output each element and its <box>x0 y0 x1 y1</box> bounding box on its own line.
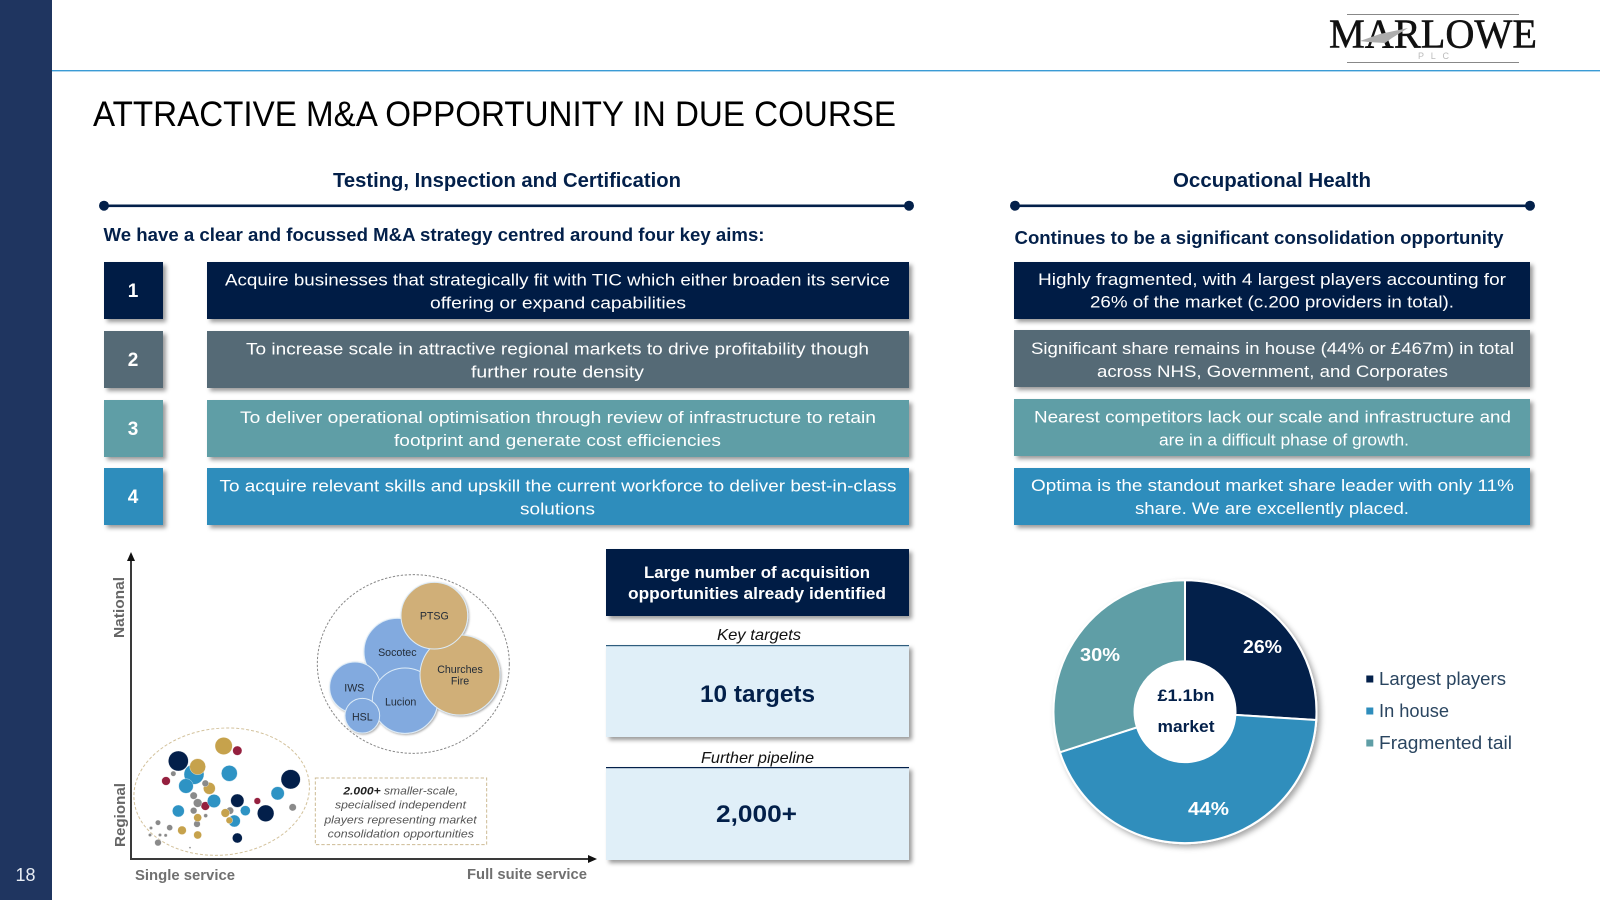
segment: in house 44% <box>1060 715 1316 843</box>
axis label: National: National <box>112 577 128 638</box>
aim 4 <box>104 468 909 525</box>
aim 1: Acquire businesses that strategically fit with TIC which either broaden its service <box>225 270 890 290</box>
aim 4: solutions <box>520 500 595 518</box>
aim 2: further route density <box>471 362 645 382</box>
callout: 2,000+ smaller-scale players: players representing market <box>323 814 478 826</box>
legend: Largest players <box>1379 669 1506 689</box>
aim 1 <box>104 262 909 319</box>
label: Further pipeline: Further pipeline <box>701 750 814 767</box>
logo: Marlowe PLC: MARLOWE <box>1329 10 1537 56</box>
header rule <box>52 70 1600 71</box>
value labels: 30% <box>1080 644 1120 665</box>
title: ATTRACTIVE M&A OPPORTUNITY IN DUE COURSE <box>93 95 896 134</box>
large players bubbles: Churches <box>437 664 483 676</box>
callout: 2,000+ smaller-scale players: 2.000+ smaller-scale, <box>342 785 458 797</box>
page number: 18 <box>16 865 36 885</box>
point 4: Optima is the standout market share leader with only 11% <box>1031 476 1514 495</box>
aim 4: 4 <box>128 487 139 508</box>
large players bubbles: Socotec <box>378 647 417 659</box>
legend: Fragmented tail <box>1379 733 1512 753</box>
donut chart: £1.1bn market <box>1052 579 1318 844</box>
heading: Occupational Health: Occupational Health <box>1173 170 1371 192</box>
point 4 <box>1014 468 1530 525</box>
legend <box>1366 669 1512 753</box>
large players bubbles: IWS <box>344 683 364 695</box>
centre label <box>1158 686 1215 736</box>
axis label: Single service: Single service <box>135 868 235 884</box>
large players bubbles: Fire <box>451 676 469 688</box>
banner: acquisition opportunities: opportunities already identified <box>628 585 886 603</box>
aim 3: 3 <box>128 419 138 440</box>
centre label: £1.1bn <box>1158 686 1214 705</box>
point 3: are in a difficult phase of growth. <box>1159 430 1409 450</box>
large players bubbles: PTSG <box>420 610 449 622</box>
aim 3: To deliver operational optimisation through review of infrastructure to retain <box>240 408 876 427</box>
large players bubbles: HSL <box>352 711 373 723</box>
point 3: Nearest competitors lack our scale and infrastructure and <box>1034 408 1511 426</box>
point 1: 26% of the market (c.200 providers in total). <box>1090 292 1454 312</box>
segment: largest players 26% <box>1185 580 1316 720</box>
subheading: TIC: We have a clear and focussed M&A strategy centred around four key aims: <box>104 224 764 245</box>
large players bubbles <box>317 575 509 753</box>
segment: fragmented tail 30% <box>1053 580 1185 752</box>
aim 3 <box>104 400 909 457</box>
label: Key targets: Key targets <box>717 627 801 644</box>
large players bubbles: Lucion <box>385 696 416 708</box>
legend: In house <box>1379 701 1449 721</box>
aim 1: offering or expand capabilities <box>430 294 686 312</box>
aim 3: footprint and generate cost efficiencies <box>394 431 721 450</box>
card: 10 targets <box>606 645 909 737</box>
chart: market map bubble chart <box>112 552 597 884</box>
axis label: Regional: Regional <box>113 783 129 847</box>
aim 4: To acquire relevant skills and upskill the current workforce to deliver best-in-class <box>220 476 896 496</box>
point 4: share. We are excellently placed. <box>1135 499 1409 518</box>
axis label: Full suite service: Full suite service <box>467 867 587 883</box>
point 3 <box>1014 399 1530 456</box>
aim 1: 1 <box>128 281 139 302</box>
point 1: Highly fragmented, with 4 largest players accounting for <box>1038 270 1506 289</box>
callout: 2,000+ smaller-scale players: consolidation opportunities <box>328 828 475 840</box>
logo: Marlowe PLC: PLC <box>1418 51 1450 61</box>
subheading: Occupational Health: Continues to be a significant consolidation opportunity <box>1014 227 1504 248</box>
sidebar <box>0 0 52 900</box>
heading: TIC: Testing, Inspection and Certification <box>333 170 681 192</box>
card: 2,000+ <box>606 767 909 860</box>
callout: 2,000+ smaller-scale players: specialised independent <box>335 799 467 811</box>
aim 2: 2 <box>128 350 138 371</box>
banner: acquisition opportunities <box>606 549 909 616</box>
point 2: across NHS, Government, and Corporates <box>1097 362 1448 381</box>
panel: acquisition opportunities <box>606 549 909 860</box>
axes <box>127 552 597 863</box>
panel: Occupational Health <box>1010 170 1535 525</box>
heading rule: Occupational Health <box>1010 201 1535 211</box>
value labels: 26% <box>1243 636 1282 657</box>
centre label: market <box>1158 717 1215 736</box>
callout: 2,000+ smaller-scale players <box>315 778 487 845</box>
aim 2 <box>104 331 909 388</box>
value labels <box>1080 636 1282 819</box>
panel: Testing, Inspection and Certification <box>99 170 914 525</box>
value labels: 44% <box>1188 798 1229 819</box>
point 2: Significant share remains in house (44% or £467m) in total <box>1031 339 1514 358</box>
banner: acquisition opportunities: Large number of acquisition <box>644 564 870 582</box>
point 2 <box>1014 330 1530 387</box>
small players bubbles <box>128 719 316 864</box>
heading rule: TIC <box>99 201 914 211</box>
aim 2: To increase scale in attractive regional markets to drive profitability though <box>246 340 869 358</box>
card: 10 targets: 10 targets <box>700 681 815 708</box>
card: 2,000+: 2,000+ <box>716 801 797 828</box>
point 1 <box>1014 262 1530 319</box>
